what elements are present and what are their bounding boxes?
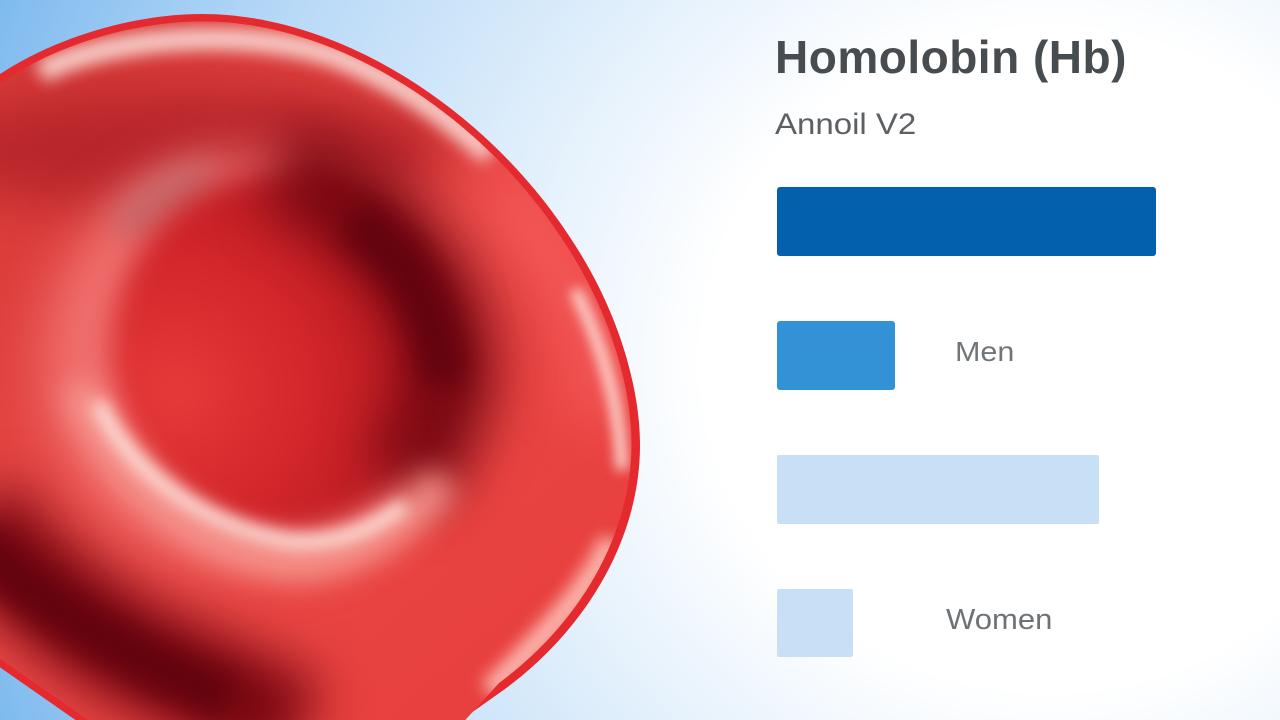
label: women: Women: [946, 604, 1052, 636]
white highlight arc: [98, 402, 405, 542]
dimple center: [110, 172, 450, 532]
greyed upper left sheen: [110, 150, 215, 245]
bottom right highlight: [490, 540, 612, 692]
dark shadow: lower left core: [0, 540, 230, 700]
cell body shading: [0, 0, 650, 720]
top highlight: [40, 39, 490, 155]
bar: dark blue top bar: [777, 187, 1156, 256]
right body glow: [500, 190, 605, 420]
subtitle: Annoil V2: [775, 108, 916, 141]
outer rim: [0, 14, 640, 720]
bar: light blue wide bar: [777, 455, 1099, 524]
dark shadow: lower left wide: [0, 515, 300, 720]
dark shadow: upper right wide: [280, 170, 451, 480]
bar: women: [777, 589, 853, 657]
illustration: red blood cell: [0, 14, 640, 720]
title: Homolobin (Hb): [775, 31, 1127, 83]
bar: men: [777, 321, 895, 390]
lower rim glow: [78, 385, 445, 562]
right outer highlight: [575, 290, 622, 470]
dark shadow: upper right core: [350, 220, 445, 385]
label: men: Men: [955, 336, 1014, 367]
pink halo around dimple: [45, 157, 455, 567]
upper body darker band: [0, 88, 450, 212]
